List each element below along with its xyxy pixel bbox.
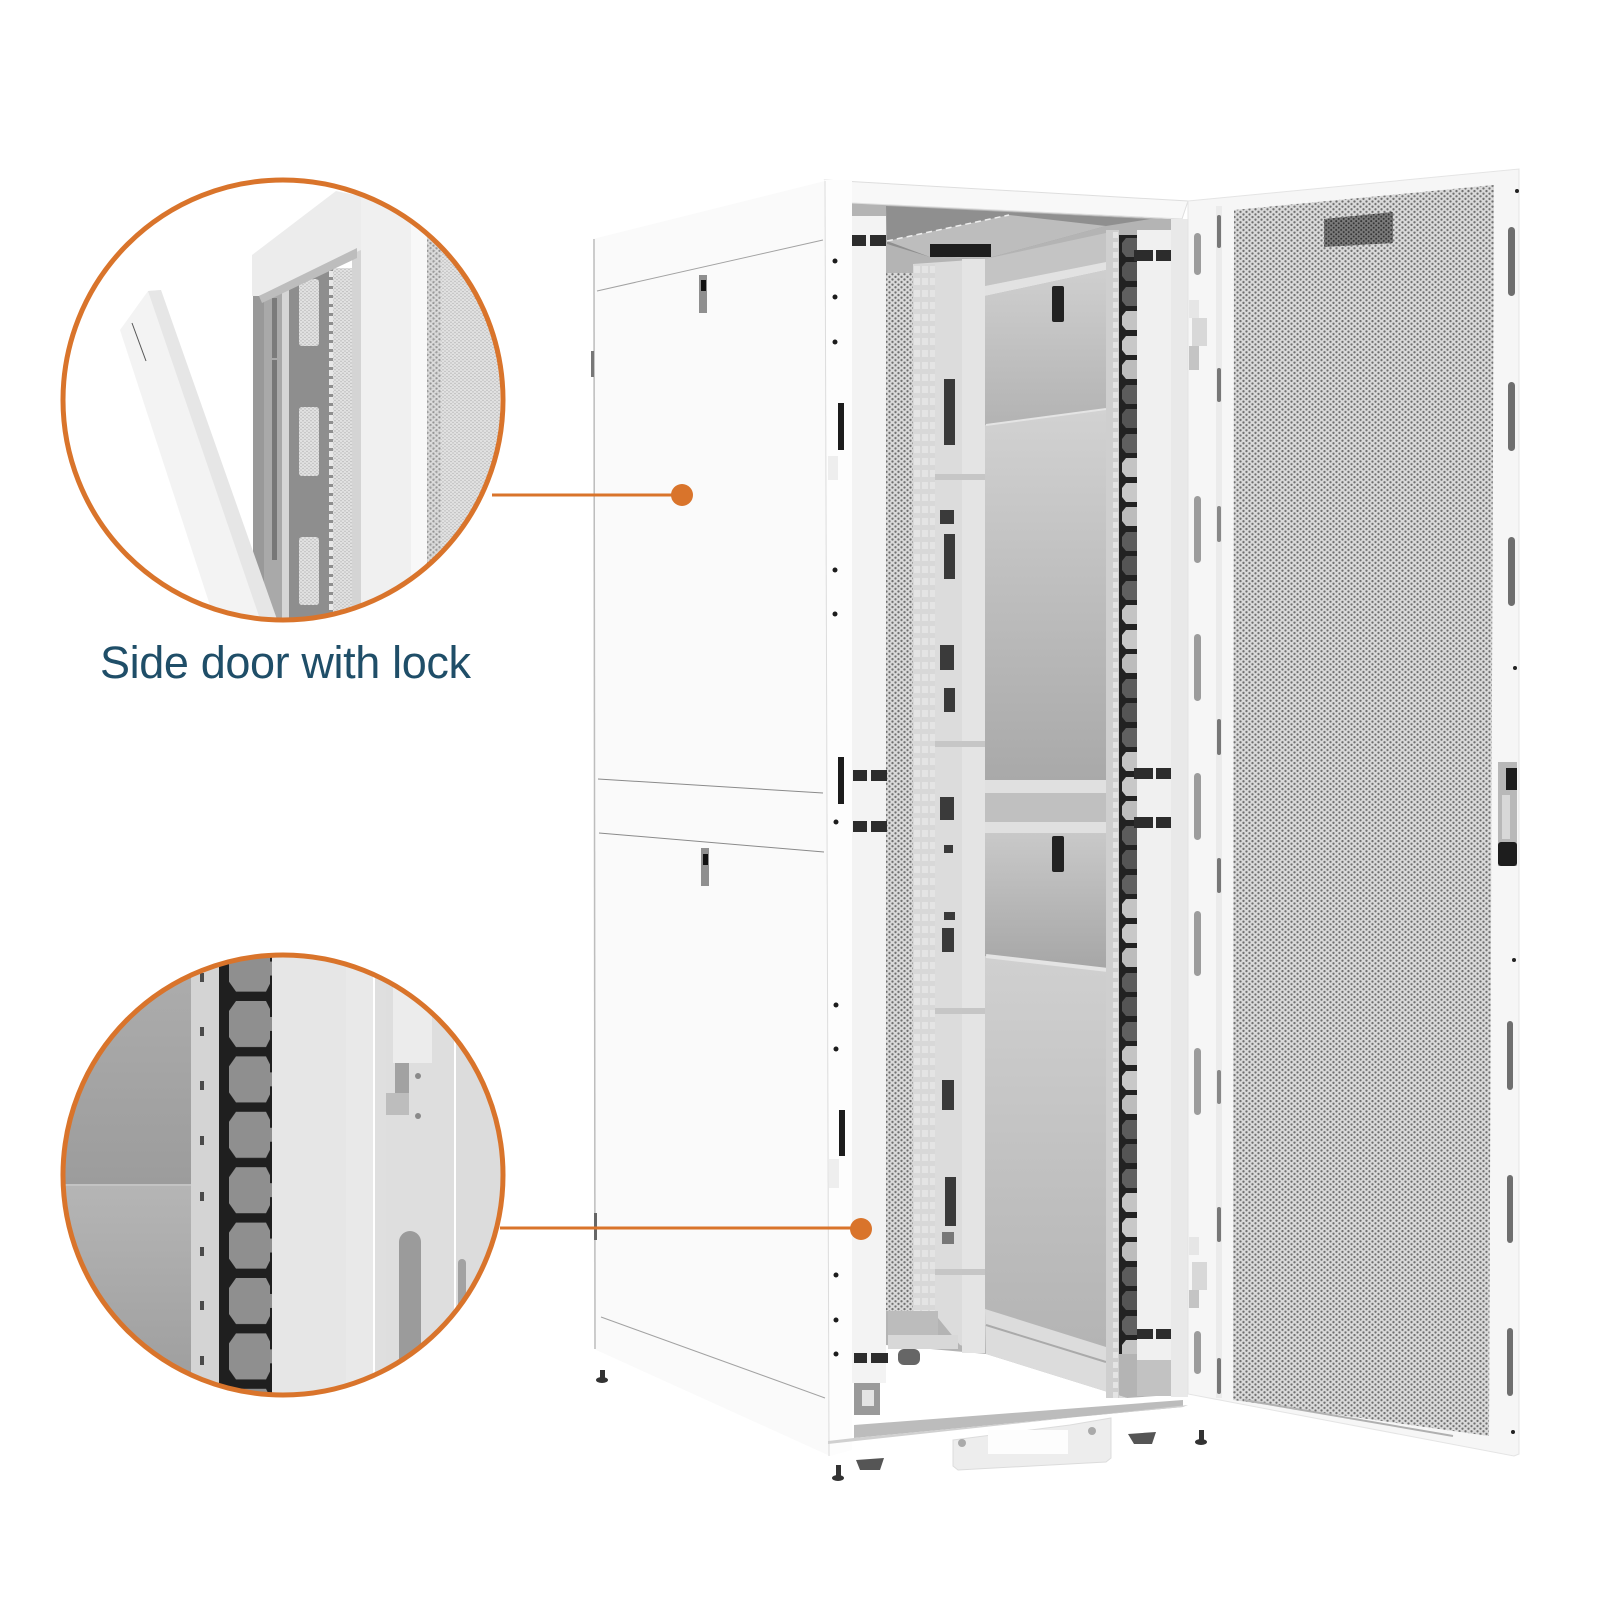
interior of the cabinet: [852, 203, 1171, 1398]
side door lock, upper: [699, 275, 707, 313]
left cable manager panel: [852, 216, 888, 1415]
base bracket: [953, 1418, 1111, 1470]
left rack column: [913, 259, 985, 1353]
tilted door panel: [120, 290, 279, 630]
door perforated panel: [1233, 185, 1494, 1436]
right cable manager panel: [1134, 230, 1171, 1360]
floor sill: [828, 1400, 1188, 1444]
left perforated strip: [886, 273, 913, 1311]
cable rings: [219, 950, 272, 1400]
door handle: [1498, 762, 1517, 866]
rack cut-outs: [940, 379, 956, 1244]
leader line: side door: [492, 484, 693, 506]
cable ring column: [1119, 235, 1137, 1354]
caption: side door with lock: Side door with lock: [100, 637, 472, 688]
door hinge, upper: [1189, 300, 1207, 370]
circle outline: [63, 955, 503, 1395]
side door lock, lower: [701, 848, 709, 886]
cabinet: rack enclosure: [591, 169, 1519, 1481]
door hinge, lower: [1189, 1237, 1207, 1308]
lower left rails and caster: [888, 1311, 958, 1365]
right rack rail: [1106, 230, 1119, 1398]
lower right corner: [1137, 1360, 1171, 1396]
detail photo: cable rings and hinge: [60, 950, 506, 1411]
open front door: [1188, 169, 1519, 1456]
detail photo: side door: [120, 191, 500, 618]
back wall clips: [1052, 286, 1064, 872]
rail fasteners: [200, 973, 204, 1365]
infographic canvas: [60, 168, 1520, 1481]
oval slots: [399, 1231, 466, 1359]
feet and casters: [596, 1370, 1207, 1481]
side panel: [591, 181, 830, 1456]
front frame: [825, 180, 1188, 1456]
circle outline: [63, 180, 503, 620]
leader line: cable manager: [500, 1218, 872, 1240]
callout: cable manager detail: [60, 950, 506, 1411]
door vent: [1324, 212, 1393, 247]
door slots: [1194, 189, 1519, 1434]
back wall panels: [985, 233, 1127, 1398]
hinge: [386, 985, 432, 1119]
callout: side door detail: [60, 170, 510, 630]
front frame holes and slots: [828, 258, 845, 1356]
